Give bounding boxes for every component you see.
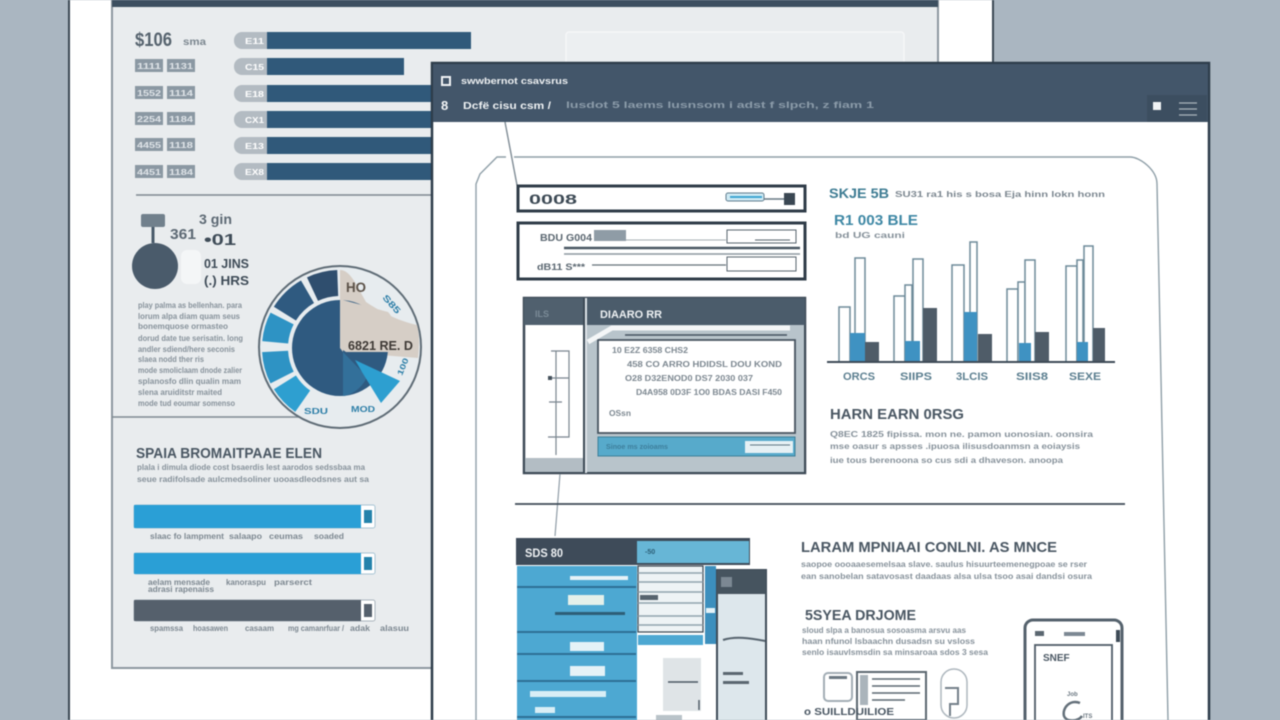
row labels: $106 (135, 30, 172, 51)
text block: slena aruiditstr maited (138, 388, 222, 397)
column chart: SIIPS (900, 371, 932, 383)
panel: diagram card: DIAARO RR (600, 309, 662, 321)
text block: lorum alpa diam quam seus (138, 312, 241, 321)
window header: Dcfë cisu csm / (463, 101, 551, 112)
connector line (505, 122, 517, 185)
progress bar 3: hoasawen (193, 624, 228, 633)
horizontal bar chart (234, 32, 471, 180)
progress bar 1: ceumas (269, 532, 304, 541)
text block: lower intro (137, 463, 370, 484)
donut chart (259, 266, 421, 428)
row labels: 4455 (137, 141, 162, 150)
row labels: 1184 (169, 168, 194, 177)
text block: mode tud eoumar somenso (138, 399, 235, 408)
form box: dB11 S*** (537, 262, 586, 272)
stat block with circle icon: •01 (204, 232, 236, 249)
window header: lusdot 5 laems lusnsom i adst f slpch, z fiam 1 (566, 100, 874, 110)
icon: menu lines (1179, 103, 1197, 115)
horizontal bar chart: E11 (245, 37, 265, 46)
horizontal bar chart: CX1 (245, 116, 265, 125)
window header: swwbernot csavsrus (461, 76, 568, 86)
text block: andler sdiend/here seconis (138, 345, 236, 354)
ghost card (566, 32, 904, 64)
front window (432, 63, 1209, 720)
phone mockup: SNEF (1043, 653, 1070, 664)
progress bar 2: aelam mensade (148, 578, 211, 587)
progress bar 2: kanoraspu (226, 578, 266, 587)
text block: subsection: haan nfunol lsbaachn dusadsn su vsloss (802, 637, 976, 646)
row labels: 2254 (137, 115, 162, 124)
chart heading (829, 185, 1105, 240)
icon: menu square (1153, 102, 1161, 110)
progress bar 3 (134, 600, 409, 633)
column chart: SIIS8 (1016, 371, 1048, 383)
column chart: SEXE (1069, 371, 1101, 383)
text block: right section: ean sanobelan satavosast daadaas alsa ulsa tsoo asai dandsi osura (801, 572, 1093, 581)
text block: slaea nodd ther ris (138, 355, 205, 364)
header icon 1 (442, 77, 450, 85)
phone mockup: ITS (1083, 714, 1092, 720)
text block: lower intro: plala i dimula diode cost bsaerdis lest aarodos sedssbaa ma (137, 463, 366, 472)
progress bar 1: salaapo (229, 532, 262, 541)
progress bar 3: alasuu (380, 624, 409, 633)
progress bar 2: parserct (274, 578, 312, 587)
progress bar 3: spamssa (150, 624, 184, 633)
text block: lower intro: seue radifolsade aulcmedsoliner uooasdleodsnes aut sa (137, 475, 370, 484)
donut chart: 6821 RE. D (348, 338, 413, 353)
row labels: 1111 (137, 62, 162, 71)
text block: splanosfo dlin qualin mam (138, 377, 241, 386)
back page (69, 0, 993, 720)
row labels: 1114 (169, 89, 194, 98)
text block: subsection (802, 626, 989, 657)
inner note: 458 CO ARRO HDIDSL DOU KOND (627, 360, 782, 369)
small UI sketch: o SUILLDUILIOE (804, 707, 894, 718)
heading: lower section: SPAIA BROMAITPAAE ELEN (136, 445, 322, 462)
blue status bar (598, 437, 795, 456)
stat block with circle icon: 01 JINS (204, 256, 249, 271)
stat block with circle icon: (.) HRS (204, 273, 249, 288)
stat block with circle icon: 3 gin (199, 211, 232, 227)
donut chart: HO (346, 279, 366, 295)
stat block with circle icon (132, 211, 249, 289)
text block: subsection: sloud slpa a banosua sosoasma arsvu aas (802, 626, 967, 635)
small UI sketch (804, 669, 967, 720)
icon: remote (941, 669, 967, 718)
chart heading: R1 003 BLE (834, 212, 918, 229)
donut chart: S85 (381, 293, 403, 316)
text block: bonemquose ormasteo (138, 322, 228, 331)
progress bar 2 (134, 553, 375, 594)
dashboard mockup: SDS 80 (525, 546, 563, 560)
table rows (638, 566, 716, 645)
inner note: OSsn (609, 409, 631, 418)
horizontal bar chart: EX8 (245, 168, 265, 177)
text block: play palma as bellenhan. para (138, 301, 242, 310)
column chart: ORCS (843, 371, 875, 383)
form box (518, 223, 805, 279)
chart heading: bd UG cauni (835, 231, 905, 240)
row labels: 1131 (169, 62, 194, 71)
progress bar 1 (134, 505, 375, 541)
row labels: 1184 (169, 115, 194, 124)
progress bar 1: soaded (314, 532, 344, 541)
row labels: 4451 (137, 168, 162, 177)
text block: right section: saopoe oooaaesemelsaa slave. saulus hisuurteemenegpoae se rser (801, 560, 1087, 569)
text block: chart notes: mse oasur s apsses .ipuosa ilisusdoanmsn a eoiaysis (830, 442, 1081, 451)
column chart (827, 185, 1115, 383)
heading: subsection: 5SYEA DRJOME (805, 607, 916, 624)
row labels (135, 30, 207, 178)
dashboard mockup: -50 (645, 549, 655, 556)
tree diagram (548, 351, 569, 455)
progress bar 2: adrasi rapenaiss (148, 585, 215, 594)
window header (433, 64, 1208, 122)
side column (717, 570, 766, 720)
row labels: 1552 (137, 89, 162, 98)
progress bar 1: slaac fo lampment (150, 532, 224, 541)
inner note: O28 D32ENOD0 DS7 2030 037 (625, 374, 754, 383)
heading: chart notes: HARN EARN 0RSG (830, 406, 964, 423)
panel: report sheet (112, 0, 938, 668)
form box: BDU G004 (540, 233, 592, 244)
progress bar 3: adak (350, 624, 371, 633)
text block: dorud date tue serisatin. long (138, 334, 243, 343)
input box: 0008 (529, 191, 577, 207)
donut chart: SDU (304, 407, 328, 416)
chart heading: SKJE 5B (829, 185, 889, 201)
text block: mode smoliclaam dnode zalier (138, 366, 242, 375)
inner note: 10 E2Z 6358 CHS2 (612, 346, 689, 355)
inner note (588, 328, 795, 433)
chart preview (638, 645, 716, 720)
horizontal bar chart: E13 (245, 142, 265, 151)
panel: diagram card (524, 298, 805, 536)
horizontal bar chart: E18 (245, 90, 265, 99)
text block: right section (801, 560, 1093, 581)
blue list (517, 566, 637, 720)
dashboard mockup (516, 538, 766, 720)
heading: right section: LARAM MPNIAAI CONLNI. AS MNCE (801, 539, 1057, 556)
donut chart: MOD (351, 405, 375, 414)
text block: subsection: senlo isauvlsmsdin sa minsaroaa sdos 3 sesa (802, 648, 989, 657)
phone mockup: Job (1067, 692, 1078, 698)
text block: chart notes: Q8EC 1825 fipissa. mon ne. pamon uonosian. oonsira (830, 430, 1094, 439)
outline frame (476, 157, 1168, 720)
text block: chart notes (830, 430, 1094, 465)
inner note: D4A958 0D3F 1O0 BDAS DASI F450 (636, 388, 783, 397)
text block (138, 301, 243, 408)
text block: chart notes: iue tous berenoona so cus sdi a dhaveson. anoopa (830, 456, 1064, 465)
panel: diagram card: ILS (535, 309, 549, 319)
row labels: sma (183, 37, 207, 48)
header icon 2: 8 (441, 98, 448, 113)
chart heading: SU31 ra1 his s bosa Eja hinn lokn honn (895, 190, 1105, 199)
phone mockup (1025, 620, 1122, 720)
input box (518, 186, 805, 211)
blue status bar: Sinoe ms zoioams (606, 444, 668, 451)
icon: refresh (1064, 702, 1082, 720)
row labels: 1118 (169, 141, 194, 150)
column chart: 3LCIS (956, 371, 988, 383)
stat block with circle icon: 361 (170, 226, 196, 243)
horizontal bar chart: C15 (245, 63, 265, 72)
donut chart: 100 (396, 356, 411, 377)
progress bar 3: casaam (245, 624, 274, 633)
progress bar 3: mg camanrfuar / (288, 624, 345, 633)
